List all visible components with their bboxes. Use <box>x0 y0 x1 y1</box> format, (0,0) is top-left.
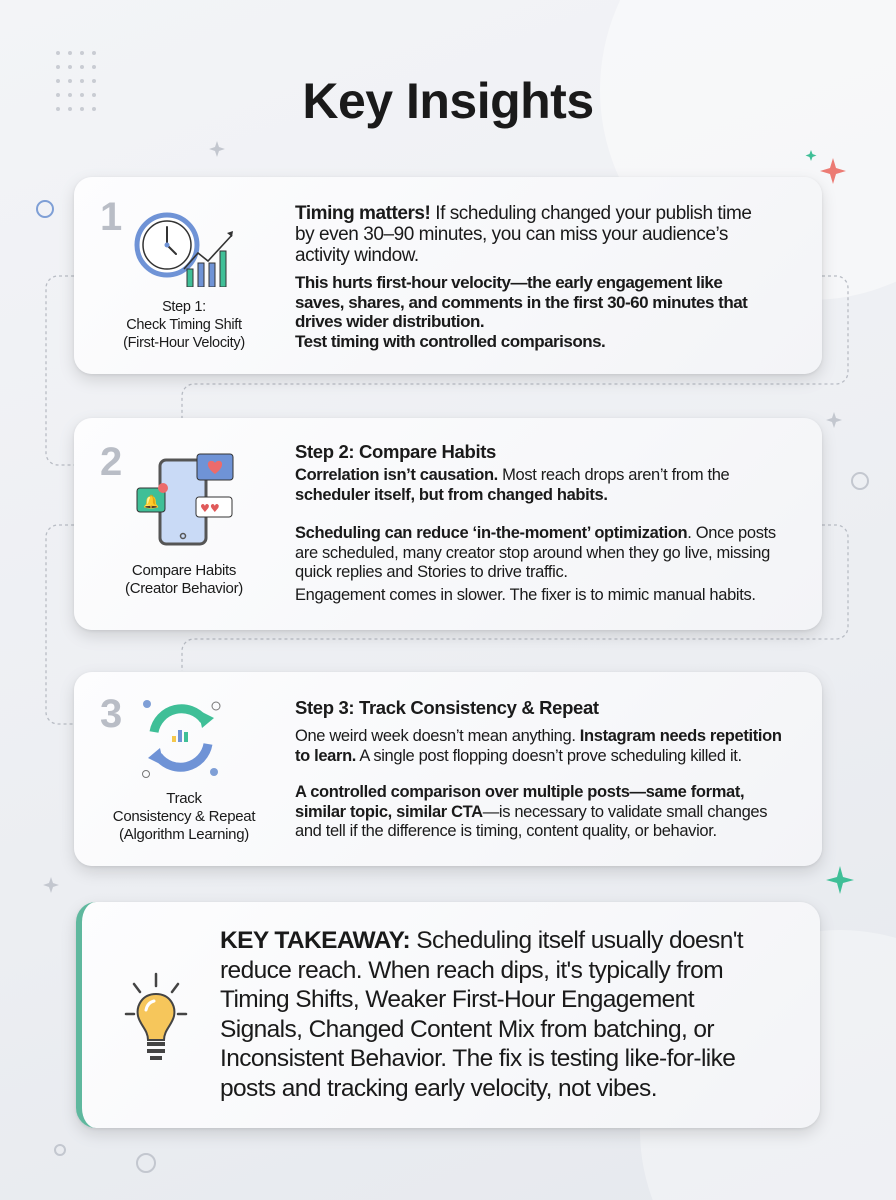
label: step 2 <box>125 562 243 597</box>
text: takeaway: KEY TAKEAWAY: Scheduling itself usually doesn't <box>220 927 743 954</box>
icon: phone with notifications: 🔔 <box>143 494 159 510</box>
label: step 3 <box>113 790 256 843</box>
text: step 2 body: are scheduled, many creator stop around when they go live, missing <box>295 544 770 562</box>
text: step 3 body: to learn. A single post flopping doesn’t prove scheduling killed it. <box>295 746 742 764</box>
icon: clock with growth chart <box>134 212 233 287</box>
label: step 3: Track <box>166 790 202 807</box>
label: step 1 <box>123 299 245 351</box>
text: step 1 body: saves, shares, and comments in the first 30-60 minutes that <box>295 292 747 312</box>
panel: step 3 <box>74 672 822 866</box>
text: step 3 body: One weird week doesn’t mean anything. Instagram needs repetition <box>295 727 782 745</box>
text: takeaway: Signals, Changed Content Mix from batching, or <box>220 1016 714 1042</box>
label: step 1: (First-Hour Velocity) <box>123 335 245 351</box>
panel: step 1 <box>74 177 822 374</box>
text: step 2 body: Engagement comes in slower. The fixer is to mimic manual habits. <box>295 586 756 604</box>
text: step 3 body: and tell if the difference is timing, content quality, or behavior. <box>295 822 717 840</box>
label: step 1: Step 1: <box>162 299 206 315</box>
label: step 3: (Algorithm Learning) <box>119 826 249 843</box>
text: step 3 body: similar topic, similar CTA—is necessary to validate small changes <box>295 802 767 820</box>
text: takeaway: Timing Shifts, Weaker First-Hour Engagement <box>220 986 694 1013</box>
label: step 2: (Creator Behavior) <box>125 580 243 597</box>
title: Key Insights <box>302 73 594 129</box>
text: step 3 body: A controlled comparison over multiple posts—same format, <box>295 783 744 801</box>
label: step 2: Compare Habits <box>132 562 236 579</box>
icon: cycle arrows with chart <box>142 700 220 778</box>
text: step 1 body: activity window. <box>295 245 419 266</box>
text: step 3 body <box>295 697 782 840</box>
step number 2: 2 <box>100 440 122 484</box>
text: step 1 body: drives wider distribution. <box>295 312 484 331</box>
text: step 1 body: Test timing with controlled comparisons. <box>295 332 605 350</box>
text: step 2 body: Scheduling can reduce ‘in-the-moment’ optimization. Once posts <box>295 524 776 542</box>
text: step 2 body: scheduler itself, but from changed habits. <box>295 486 608 504</box>
text: step 3 body: Step 3: Track Consistency & Repeat <box>295 697 599 718</box>
text: step 2 body: quick replies and Stories to drive traffic. <box>295 563 568 581</box>
text: takeaway: posts and tracking early velocity, not vibes. <box>220 1074 657 1102</box>
panel: key takeaway <box>76 902 820 1128</box>
text: takeaway: Inconsistent Behavior. The fix is testing like-for-like <box>220 1045 735 1072</box>
text: step 2 body <box>295 441 776 604</box>
step number 1: 1 <box>100 195 122 239</box>
text: step 1 body: Timing matters! If scheduling changed your publish time <box>295 203 751 224</box>
text: takeaway: reduce reach. When reach dips, it's typically from <box>220 956 723 984</box>
icon: phone with notifications <box>136 454 234 546</box>
text: step 2 body: Step 2: Compare Habits <box>295 441 496 462</box>
text: step 1 body <box>295 203 752 350</box>
icon: phone with notifications: ♥♥ <box>200 502 220 515</box>
text: takeaway <box>220 927 744 1102</box>
icon: lightbulb <box>124 972 188 1060</box>
label: step 1: Check Timing Shift <box>126 317 242 333</box>
text: step 1 body: This hurts first-hour velocity—the early engagement like <box>295 273 722 292</box>
panel: step 2 <box>74 418 822 630</box>
label: step 3: Consistency & Repeat <box>113 808 255 825</box>
text: step 2 body: Correlation isn’t causation. Most reach drops aren’t from the <box>295 466 729 484</box>
step number 3: 3 <box>100 692 122 736</box>
text: step 1 body: by even 30–90 minutes, you can miss your audience’s <box>295 224 728 245</box>
